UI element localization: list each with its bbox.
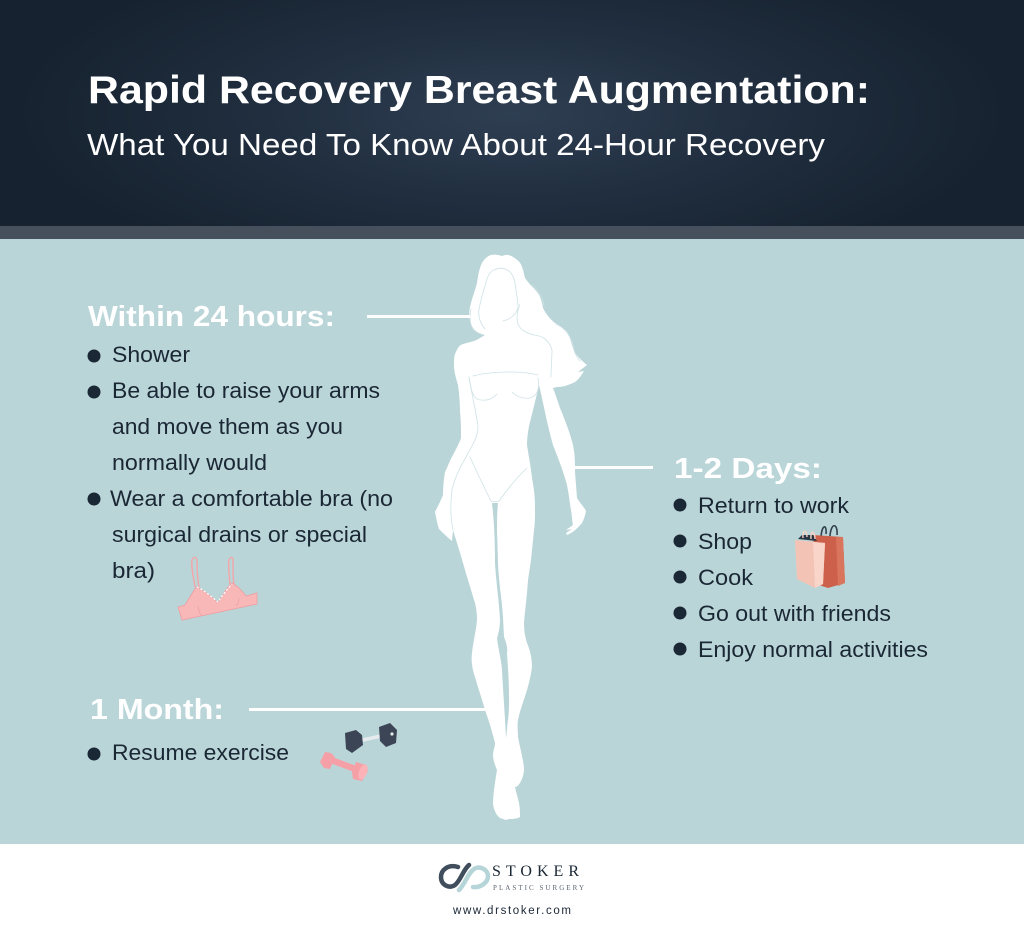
- title: Rapid Recovery Breast Augmentation:: [88, 69, 870, 112]
- checklist: [88, 342, 393, 583]
- connector: within 24 hours: [367, 315, 470, 318]
- logo: wordmark: [492, 863, 584, 892]
- checklist: Shower: [112, 342, 191, 367]
- checklist: Return to work: [698, 493, 850, 518]
- heading: Within 24 hours:: [88, 301, 335, 333]
- checklist: Resume exercise: [112, 740, 289, 765]
- checklist: [674, 493, 928, 662]
- checklist: Wear a comfortable bra (no: [110, 486, 393, 511]
- panel: header: [0, 0, 1024, 239]
- heading: 1-2 Days:: [674, 453, 822, 485]
- icon: dumbbells: [320, 723, 397, 781]
- section: 1 month: [88, 694, 289, 765]
- checklist: Be able to raise your arms: [112, 378, 380, 403]
- figure: female silhouette: [435, 255, 587, 820]
- heading: 1 Month:: [90, 694, 224, 726]
- checklist: normally would: [112, 450, 267, 475]
- logo: wordmark: STOKER: [492, 863, 584, 880]
- subtitle: What You Need To Know About 24-Hour Recovery: [87, 127, 826, 162]
- panel: footer: [0, 844, 1024, 935]
- checklist: and move them as you: [112, 414, 343, 439]
- body contour lines: [451, 268, 580, 530]
- checklist: surgical drains or special: [112, 522, 367, 547]
- icon: shopping bags: [795, 526, 845, 588]
- icon: bra: [178, 557, 257, 620]
- checklist: Cook: [698, 565, 754, 590]
- connector: 1 month: [249, 708, 485, 711]
- logo: mark: [441, 865, 488, 890]
- connector: 1-2 days: [575, 466, 653, 469]
- panel: main background: [0, 239, 1024, 844]
- checklist: Go out with friends: [698, 601, 891, 626]
- checklist: Shop: [698, 529, 752, 554]
- leg gap: [492, 503, 509, 738]
- section: 1-2 days: [674, 453, 928, 662]
- logo: wordmark: PLASTIC SURGERY: [493, 884, 584, 892]
- checklist: Enjoy normal activities: [698, 637, 928, 662]
- checklist: bra): [112, 558, 155, 583]
- website: www.drstoker.com: [452, 905, 571, 917]
- section: within 24 hours: [88, 301, 393, 583]
